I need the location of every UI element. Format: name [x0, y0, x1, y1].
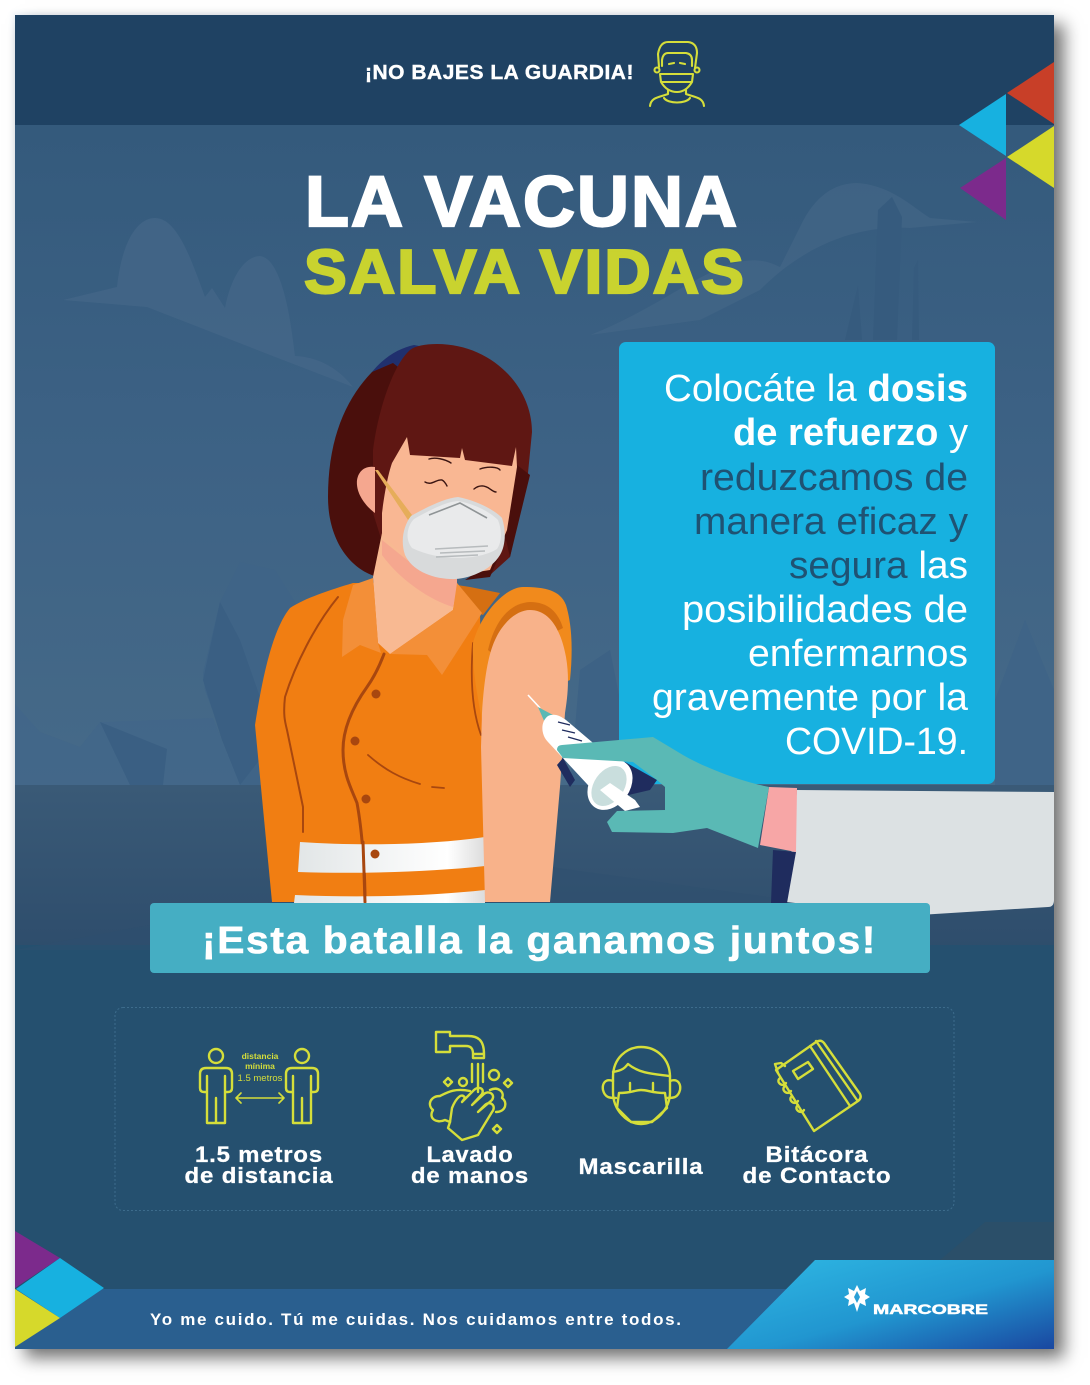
banner: ¡Esta batalla la ganamos juntos! [202, 920, 877, 962]
label: distance: 1.5 metros [195, 1142, 323, 1167]
decorative triangles bottom left [15, 1231, 104, 1347]
title: LA VACUNA [305, 163, 739, 242]
label: notebook: Bitácora [766, 1142, 868, 1167]
face mask [403, 497, 505, 579]
hair [373, 344, 532, 575]
text panel: booster message: de refuerzo y [733, 412, 968, 454]
icon: distance: mínima [245, 1061, 275, 1071]
shirt body [255, 583, 486, 902]
arm [481, 610, 568, 902]
text panel: booster message: manera eficaz y [694, 501, 968, 543]
shirt seams and buttons [284, 597, 338, 832]
mask strap [375, 470, 412, 520]
text panel: booster message: posibilidades de [682, 589, 968, 631]
text panel: booster message: gravemente por la [652, 677, 969, 719]
reflective bands [298, 837, 485, 873]
label: distance [184, 1142, 334, 1188]
neck [373, 533, 457, 654]
text panel: booster message [619, 342, 995, 784]
label: distance: de distancia [184, 1163, 334, 1188]
navy hair highlight [372, 345, 440, 385]
label: hand washing [411, 1142, 529, 1188]
icon: hand washing [430, 1032, 512, 1140]
text panel: booster message: enfermarnos [748, 633, 968, 675]
logo: Marcobre [844, 1285, 988, 1317]
title: SALVA VIDAS [304, 238, 746, 307]
icon: person with mask [650, 42, 704, 106]
text panel: booster message: Colocáte la dosis [664, 368, 968, 410]
illustration: woman being vaccinated [255, 344, 1054, 916]
text panel: booster message: segura las [789, 545, 968, 587]
banner [150, 903, 930, 973]
hair back [328, 363, 440, 577]
ear [357, 467, 375, 513]
text panel: booster message: reduzcamos de [700, 457, 968, 499]
face [382, 437, 517, 578]
label: hand washing: de manos [411, 1163, 529, 1188]
icon: distance: distancia [242, 1051, 279, 1061]
header: no bajes la guardia [365, 42, 704, 106]
cuff [760, 787, 797, 852]
doctor sleeve [787, 790, 1054, 916]
panel: prevention measures [115, 1008, 954, 1210]
logo panel [727, 1260, 1054, 1349]
collar [342, 578, 381, 657]
label: hand washing: Lavado [426, 1142, 514, 1167]
title [304, 163, 746, 307]
logo: Marcobre: MARCOBRE [873, 1301, 988, 1317]
label: notebook: de Contacto [742, 1163, 892, 1188]
sleeve [473, 587, 572, 720]
label: mask: Mascarilla [578, 1154, 704, 1179]
label: notebook [742, 1142, 892, 1188]
icon: distance [200, 1049, 318, 1123]
icon: distance: 1.5 metros [238, 1073, 283, 1084]
icon: contact notebook [775, 1041, 861, 1131]
eyes and brows [425, 458, 500, 492]
footer band [15, 1289, 815, 1349]
gloved hand [557, 737, 769, 848]
text panel: booster message: COVID-19. [785, 721, 968, 763]
icon: face mask [603, 1047, 680, 1124]
decorative triangles top right [959, 62, 1054, 220]
header: no bajes la guardia: ¡NO BAJES LA GUARDIA! [365, 62, 634, 84]
footer band: Yo me cuido. Tú me cuidas. Nos cuidamos entre todos. [150, 1310, 681, 1329]
syringe [528, 695, 657, 819]
